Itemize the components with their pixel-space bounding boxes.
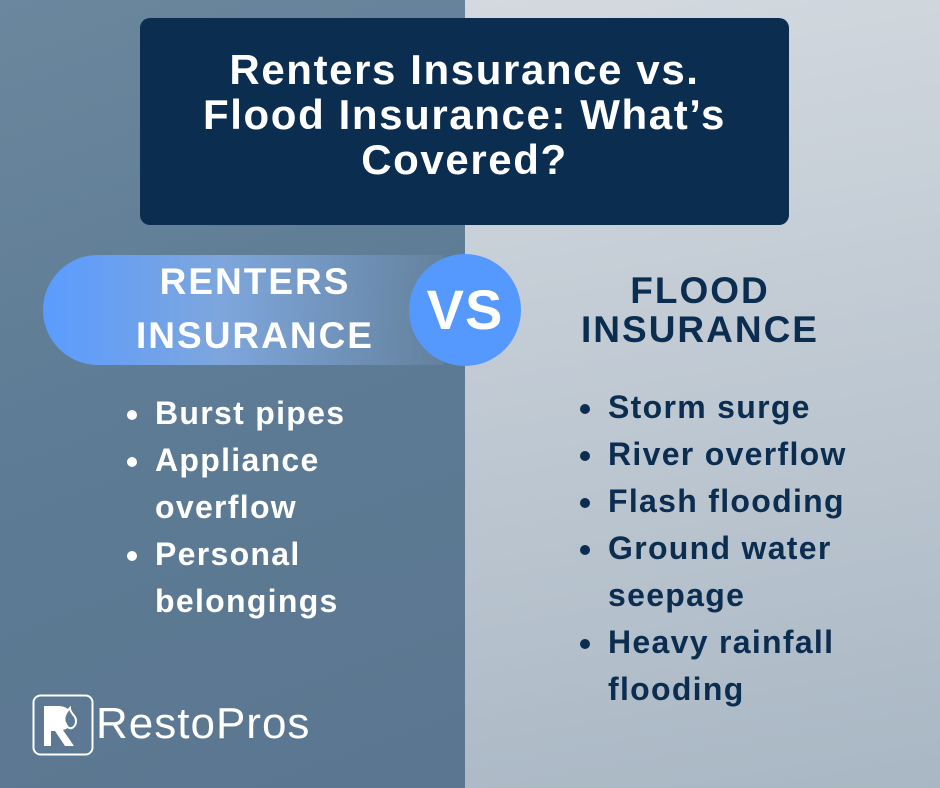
flood list: Storm surge (608, 389, 811, 425)
VS circle: VS (427, 278, 503, 341)
flood insurance heading (581, 270, 819, 350)
logo: RestoPros (32, 694, 310, 756)
pill: renters insurance heading: INSURANCE (136, 315, 374, 356)
title box (140, 18, 789, 225)
VS circle (409, 254, 521, 366)
renters list: Appliance (155, 442, 320, 478)
background right (465, 0, 940, 788)
flood list: Flash flooding (608, 483, 845, 519)
flood list: Ground water (608, 530, 832, 566)
renters list: belongings (155, 583, 339, 619)
title box: Renters Insurance vs. (229, 46, 700, 93)
pill: renters insurance heading: RENTERS (160, 261, 350, 302)
flood insurance heading: FLOOD (630, 270, 770, 311)
renters list: Burst pipes (155, 395, 345, 431)
pill: renters insurance heading (43, 255, 443, 365)
flood list: River overflow (608, 436, 847, 472)
renters list: overflow (155, 489, 297, 525)
title box: Covered? (361, 136, 568, 183)
icon: R flame (32, 694, 94, 756)
logo text: RestoPros (96, 699, 310, 748)
flood list: seepage (608, 577, 745, 613)
flood list: Heavy rainfall (608, 624, 834, 660)
flood list: flooding (608, 671, 745, 707)
background left (0, 0, 465, 788)
renters list: Personal (155, 536, 301, 572)
title box: Flood Insurance: What’s (203, 91, 726, 138)
renters list (127, 395, 345, 619)
flood list (580, 389, 847, 707)
flood insurance heading: INSURANCE (581, 309, 819, 350)
